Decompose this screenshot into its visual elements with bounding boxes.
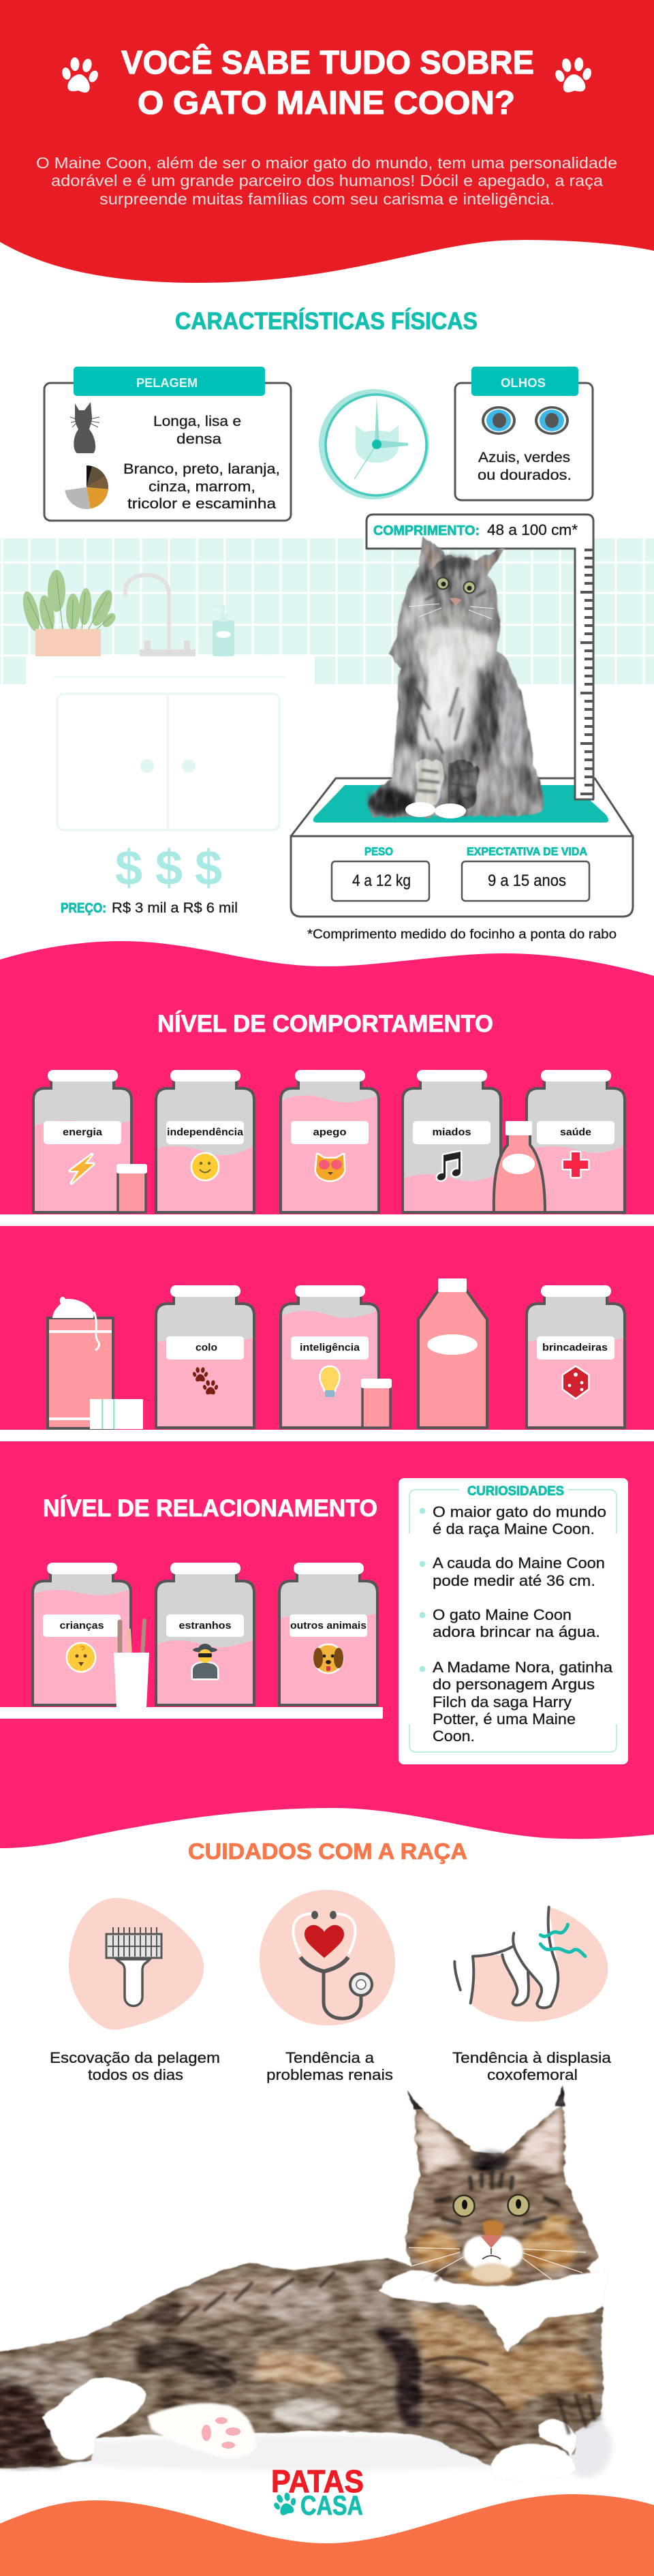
jar: estranhos	[155, 1563, 255, 1709]
white chest	[378, 2270, 608, 2351]
ruler ticks	[580, 550, 593, 794]
cat eyes and nose	[437, 578, 448, 589]
bottle shelf 2	[418, 1278, 487, 1428]
caption: Tendência à displasia	[452, 2049, 612, 2066]
icon: left paw	[59, 55, 102, 94]
caption: todos os dias	[88, 2066, 183, 2083]
curiosidades text: do personagem Argus	[433, 1676, 595, 1693]
panel: preço	[61, 841, 238, 916]
jar: outros animais	[279, 1563, 378, 1709]
panel: curiosidades	[399, 1478, 628, 1764]
jar: miados	[402, 1070, 501, 1216]
text: fur colours: cinza, marrom,	[149, 479, 255, 495]
caption: problemas renais	[266, 2066, 393, 2083]
icon: lightning	[70, 1154, 93, 1183]
text: fur colours: tricolor e escaminha	[127, 496, 276, 512]
expectativa label: EXPECTATIVA DE VIDA	[467, 845, 587, 858]
jar: crianças	[32, 1563, 131, 1709]
cabinet	[57, 694, 279, 830]
comprimento value: 48 a 100 cm*	[487, 521, 578, 538]
jar: miados: miados	[432, 1126, 471, 1138]
leg stripes	[164, 2269, 594, 2447]
curiosidades text: adora brincar na água.	[433, 1623, 600, 1640]
text: fur colours	[123, 461, 280, 512]
small jar shelf 2	[361, 1379, 392, 1428]
peso value: 4 a 12 kg	[352, 872, 411, 890]
white paws	[405, 802, 435, 817]
icon: brush	[106, 1927, 161, 2006]
price value: R$ 3 mil a R$ 6 mil	[112, 900, 238, 916]
caption	[452, 2049, 612, 2083]
jar: energia: energia	[63, 1126, 103, 1138]
scale mat	[313, 785, 608, 823]
logo	[270, 2464, 364, 2521]
olhos label: OLHOS	[501, 376, 546, 390]
cat stripes	[416, 559, 485, 799]
title: VOCÊ SABE TUDO SOBRE	[121, 44, 534, 81]
jar: estranhos: estranhos	[178, 1620, 232, 1631]
ruler with length label	[367, 515, 593, 799]
text: fur length: densa	[176, 431, 221, 447]
icon: plant	[20, 570, 118, 656]
peso label: PESO	[364, 845, 393, 858]
care item: brushing	[50, 1898, 220, 2083]
counter line	[53, 676, 285, 677]
white front paw lower	[490, 2444, 576, 2481]
white hind leg	[42, 2378, 146, 2460]
white box	[90, 1399, 143, 1429]
icon: clock	[322, 393, 426, 496]
icon: smile	[192, 1154, 218, 1180]
icon: cat silhouette	[70, 402, 99, 453]
curiosidades text: Filch da saga Harry	[433, 1693, 572, 1711]
curiosidades text: é da raça Maine Coon.	[433, 1520, 595, 1537]
blob	[69, 1898, 204, 2030]
jar: inteligência: inteligência	[300, 1342, 360, 1353]
footnote: *Comprimento medido do focinho a ponta do rabo	[307, 927, 617, 942]
icon: red cross	[563, 1152, 588, 1177]
peso value	[332, 861, 429, 901]
red wave background	[0, 0, 654, 283]
shelf 1	[0, 1214, 654, 1226]
logo: casa: CASA	[300, 2491, 363, 2521]
text: fur length: Longa, lisa e	[153, 414, 241, 429]
panel: pelagem	[44, 367, 291, 521]
jar: colo	[155, 1285, 255, 1432]
icon: dollar signs	[115, 841, 222, 895]
ruler frame	[367, 515, 593, 799]
blob and leg	[454, 1907, 608, 2022]
curiosidades text: A Madame Nora, gatinha	[433, 1659, 613, 1676]
icon: die	[563, 1367, 588, 1398]
curiosidades text: Coon.	[433, 1728, 475, 1745]
pelagem box	[44, 383, 291, 521]
pelagem label: PELAGEM	[136, 376, 198, 390]
olhos box	[455, 383, 593, 500]
head	[405, 2087, 600, 2286]
logo: patas: PATAS	[271, 2464, 364, 2499]
face: eyes	[454, 2196, 474, 2216]
scale platform	[291, 778, 633, 917]
care item: hip dysplasia	[452, 1907, 612, 2083]
title	[121, 44, 534, 121]
icon: light bulb	[321, 1367, 339, 1397]
curiosidades title: CURIOSIDADES	[467, 1484, 564, 1499]
icon: dollar signs: $	[115, 841, 142, 895]
text: fur length	[153, 414, 241, 447]
icon: right eye	[535, 406, 569, 435]
floor shadow	[14, 2416, 612, 2477]
photo: standing grey cat	[367, 536, 544, 818]
caption: Escovação da pelagem	[50, 2049, 220, 2066]
face: nose	[481, 2235, 501, 2248]
curiosidades text	[433, 1503, 613, 1745]
heading: características físicas: CARACTERÍSTICAS FÍSICAS	[175, 307, 478, 335]
icon: spy	[193, 1644, 217, 1678]
bottle shelf 1	[494, 1121, 545, 1212]
jar: crianças: crianças	[60, 1620, 104, 1631]
icon: heart-eyed cat	[316, 1154, 344, 1180]
icon: soap bottle	[212, 605, 234, 656]
icon: mouse	[52, 1297, 99, 1350]
ear tufts	[407, 2085, 565, 2110]
icon: stethoscope	[293, 1911, 372, 2019]
jar: energia	[33, 1070, 132, 1216]
text: eye colours: Azuis, verdes	[478, 450, 570, 465]
curiosidades frame	[409, 1490, 617, 1752]
expectativa value	[462, 861, 589, 901]
curiosidades text: O maior gato do mundo	[433, 1503, 606, 1520]
comprimento label: COMPRIMENTO:	[373, 523, 480, 538]
icon: faucet	[125, 575, 196, 656]
caption	[50, 2049, 220, 2083]
header panel	[0, 0, 654, 283]
shelf 3	[0, 1707, 383, 1719]
text: fur colours: Branco, preto, laranja,	[123, 461, 280, 477]
logo: paw	[270, 2490, 300, 2517]
mouse container	[48, 1297, 143, 1429]
icon: right paw	[552, 56, 594, 93]
jar: independência	[155, 1070, 255, 1216]
orange footer wave	[0, 2494, 654, 2576]
caption: coxofemoral	[487, 2066, 578, 2083]
intro paragraph: O Maine Coon, além de ser o maior gato do mundo, tem uma personalidade	[36, 154, 617, 172]
intro paragraph	[36, 154, 617, 208]
jar: inteligência	[280, 1285, 379, 1432]
jar: independência: independência	[167, 1126, 244, 1138]
intro paragraph: adorável e é um grande parceiro dos humanos! Dócil e apegado, a raça	[51, 172, 603, 189]
jar: saúde: saúde	[560, 1126, 591, 1138]
curiosidades text: A cauda do Maine Coon	[433, 1554, 605, 1571]
care item: kidneys	[260, 1890, 395, 2083]
curiosidades text: O gato Maine Coon	[433, 1606, 572, 1623]
intro paragraph: surpreende muitas famílias com seu carisma e inteligência.	[99, 190, 555, 208]
curiosidades card	[399, 1478, 628, 1764]
heading: nível de comportamento: NÍVEL DE COMPORTAMENTO	[157, 1010, 493, 1037]
icon: two paws	[192, 1367, 219, 1394]
icon: dollar signs: $	[195, 841, 222, 895]
expectativa value: 9 a 15 anos	[488, 872, 566, 890]
icon: baby	[67, 1644, 95, 1671]
chart: colour pie	[65, 465, 108, 509]
panel: olhos	[455, 367, 593, 500]
scale body	[291, 836, 633, 917]
caption	[266, 2049, 393, 2083]
jar: colo: colo	[196, 1342, 217, 1353]
small jar shelf 1	[116, 1164, 147, 1212]
paw pad	[147, 2403, 256, 2458]
kitchen scene	[0, 538, 654, 830]
bullets	[420, 1507, 425, 1672]
heading: cuidados com a raça: CUIDADOS COM A RAÇA	[188, 1839, 467, 1864]
face: forehead stripes	[436, 2171, 559, 2223]
icon: left eye	[482, 406, 516, 435]
jar: apego: apego	[313, 1126, 346, 1138]
price label: PREÇO:	[61, 901, 106, 916]
icon: cup with sticks	[114, 1621, 149, 1707]
jar: outros animais: outros animais	[290, 1620, 367, 1631]
blob	[260, 1890, 395, 2025]
face: muzzle	[463, 2220, 523, 2282]
jar: brincadeiras	[526, 1285, 625, 1432]
photo: lying tabby cat	[0, 2085, 612, 2481]
jar: brincadeiras: brincadeiras	[542, 1342, 608, 1353]
icon: dollar signs: $	[155, 841, 183, 895]
title: O GATO MAINE COON?	[138, 85, 515, 121]
shelf 2	[0, 1430, 654, 1441]
curiosidades text: Potter, é uma Maine	[433, 1711, 576, 1728]
cat body	[0, 2085, 608, 2481]
icon: dog	[313, 1645, 343, 1672]
curiosidades text: pode medir até 36 cm.	[433, 1572, 595, 1589]
whiskers	[409, 2248, 586, 2280]
caption: Tendência a	[285, 2049, 375, 2066]
tile wall	[0, 538, 654, 684]
jar: apego	[280, 1070, 379, 1216]
text: eye colours: ou dourados.	[478, 467, 572, 483]
icon: music note	[437, 1152, 461, 1180]
counter	[26, 656, 315, 687]
scale top	[291, 778, 633, 836]
heading: nível de relacionamento: NÍVEL DE RELACIONAMENTO	[43, 1494, 377, 1522]
pink section background	[0, 941, 654, 1848]
text: eye colours	[478, 450, 572, 483]
olhos tab	[471, 367, 578, 396]
jar: saúde	[526, 1070, 625, 1216]
pelagem tab	[74, 367, 265, 396]
